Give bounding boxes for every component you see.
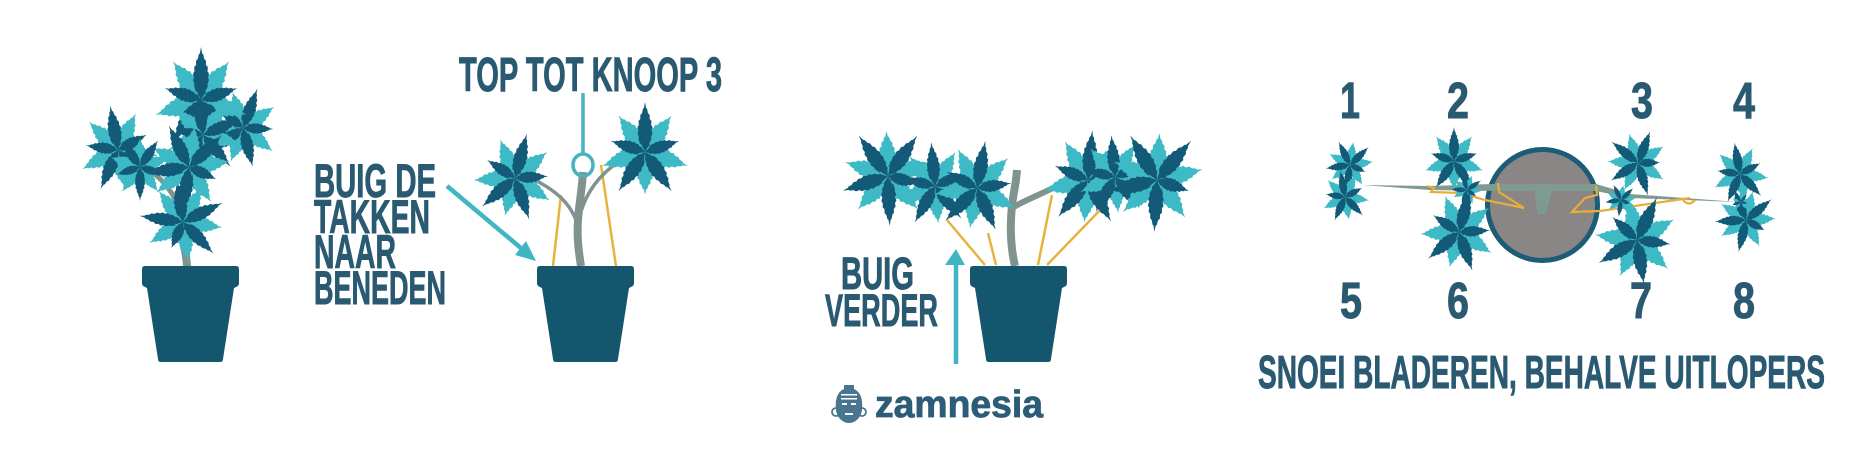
pot seen from above <box>1480 142 1605 268</box>
callout: buig verder <box>825 248 965 364</box>
numbers bottom row: 7 <box>1630 272 1652 329</box>
panel: plant bent further <box>840 126 1208 362</box>
leaf cluster <box>70 47 293 268</box>
text block <box>314 154 446 314</box>
tie-down strings top view <box>1427 183 1695 212</box>
numbers top row: 1 <box>1340 72 1360 129</box>
numbers top row <box>1340 72 1755 129</box>
numbers bottom row: 8 <box>1733 272 1755 329</box>
flower pot <box>970 266 1067 362</box>
flower pot <box>537 266 634 362</box>
numbers bottom row: 5 <box>1340 272 1362 329</box>
heading: TOP TOT KNOOP 3 <box>459 49 722 102</box>
text block: VERDER <box>825 285 938 336</box>
numbers top row: 2 <box>1447 72 1469 129</box>
numbers top row: 3 <box>1631 72 1653 129</box>
text block <box>825 248 938 336</box>
tie-down strings <box>908 175 1102 265</box>
panel: plant before bending <box>70 47 293 362</box>
numbers top row: 4 <box>1733 72 1755 129</box>
panel: top view <box>1258 72 1825 398</box>
plant stem and branches <box>140 130 240 266</box>
icon: mask <box>832 385 866 423</box>
leaf fans <box>464 102 691 228</box>
arrow up <box>945 249 965 364</box>
text block: BUIG <box>841 248 914 299</box>
callout: top tot knoop 3 <box>459 49 722 176</box>
plant stem and branches <box>535 152 640 266</box>
tie-down strings <box>553 165 616 266</box>
text block: NAAR <box>314 225 396 278</box>
plant stem and branches <box>893 170 1063 266</box>
wordmark: zamnesia <box>875 384 1044 426</box>
logo: zamnesia <box>832 384 1044 426</box>
panel: plant with bent branches <box>464 102 691 362</box>
arrow <box>447 186 536 261</box>
callout: buig de takken naar beneden <box>314 154 536 314</box>
text block: BENEDEN <box>314 261 446 314</box>
branches top view <box>1362 184 1738 214</box>
leaf fans top view <box>1316 125 1783 295</box>
flower pot <box>142 266 239 362</box>
pointer line and ring <box>573 93 593 176</box>
leaf fans <box>840 126 1208 237</box>
numbers bottom row <box>1340 272 1755 329</box>
text block: TAKKEN <box>314 190 430 243</box>
numbers bottom row: 6 <box>1447 272 1469 329</box>
text block: BUIG DE <box>314 154 436 207</box>
